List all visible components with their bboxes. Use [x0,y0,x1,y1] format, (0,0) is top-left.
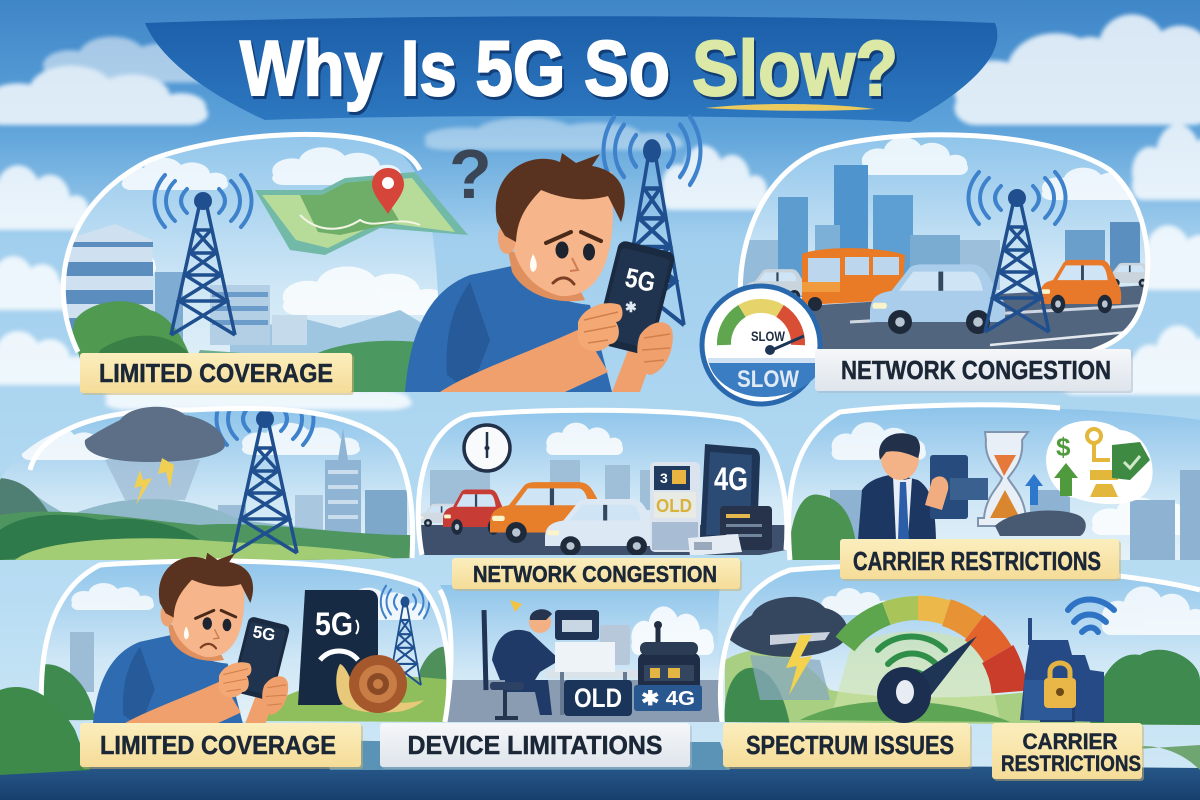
panel: carrier restrictions middle [785,405,1200,565]
title underline [705,104,875,111]
tower left [154,175,252,335]
4G phone [700,444,760,540]
label: carrier restrictions bottom [992,723,1144,781]
label: limited coverage bottom [80,723,363,769]
panel: limited coverage bottom [35,553,455,730]
restriction icons: $ [1056,432,1071,462]
label: carrier restrictions bottom: RESTRICTIONS [1001,751,1141,776]
road [808,286,1144,349]
monitors [555,610,630,672]
buildings [218,428,407,540]
man figure [405,153,676,392]
title highlighted word: Slow? [692,24,898,112]
map [255,172,468,255]
panel: network congestion top [730,130,1160,360]
panel: limited coverage top [61,132,468,392]
background clouds [0,14,1200,410]
label: network congestion top: NETWORK CONGESTION [841,355,1111,385]
road [421,525,786,555]
snail [336,655,424,713]
floor [445,680,720,725]
green wifi [878,636,945,677]
panel: network congestion middle [410,405,800,560]
label: network congestion top [815,349,1133,393]
label: limited coverage top: LIMITED COVERAGE [99,358,333,388]
businessman [858,433,988,540]
bush [788,494,858,560]
OLD box [564,680,632,716]
title banner [145,16,997,122]
panel: device limitations [438,585,720,722]
skyline [70,632,94,692]
gauge badge [702,286,824,404]
label: carrier restrictions bottom: CARRIER [1022,729,1118,754]
speed gauge [845,608,1010,692]
big man with phone [405,117,700,392]
locked building [1020,618,1104,722]
hourglass [978,432,1030,526]
small tower [381,586,429,685]
hills [35,494,405,560]
label: spectrum issues [723,723,972,769]
up arrow [1025,474,1043,505]
badge small word: SLOW [751,328,786,344]
phone text: 5G [623,262,658,298]
traffic cars [745,248,1152,334]
label: carrier restrictions middle [840,539,1121,581]
man small [93,553,290,727]
4G box: ✱ 4G [641,688,695,710]
skyline [430,460,650,510]
storm cloud [85,407,225,505]
storm cloud right [730,597,848,700]
badge large word: SLOW [737,366,799,393]
OLD box: OLD [574,683,622,713]
restriction icons [1046,421,1153,504]
4G phone: 4G [714,461,748,497]
bushes [72,301,189,358]
server [720,506,772,550]
modem [688,534,742,556]
old router [638,621,700,695]
question mark: ? [449,135,492,213]
city skyline [740,165,1140,300]
phone label: 5G [251,622,277,645]
label: device limitations: DEVICE LIMITATIONS [408,730,662,760]
panel: spectrum issues [715,560,1200,730]
tower right [968,172,1066,332]
phone sparkle: ✱ [625,299,637,315]
title text: Why Is 5G So [240,24,670,112]
gauge needle [877,636,977,723]
building left [65,224,307,345]
old phone stack: OLD [656,496,692,516]
cars [418,482,660,556]
tower storm [216,393,314,553]
clock [464,425,510,471]
old phone stack: 3 [660,470,668,486]
trees and grass [420,646,446,680]
label: network congestion middle: NETWORK CONGESTION [473,561,717,587]
map pin [372,168,404,214]
wifi blue [1068,600,1114,632]
label: carrier restrictions middle: CARRIER RESTRICTIONS [853,546,1101,576]
mountains [230,310,421,353]
desk person [484,600,640,718]
label: device limitations [380,723,692,769]
label: limited coverage top [80,353,354,395]
4G box [634,685,702,711]
skyline [830,470,1200,560]
label: limited coverage bottom: LIMITED COVERAGE [100,730,336,760]
road and ground [0,687,1200,800]
label: spectrum issues: SPECTRUM ISSUES [746,730,954,760]
big phone: 5G [315,606,353,642]
panel: storm and tower [0,406,416,560]
tower behind man [604,117,700,325]
hills and trees [725,650,1200,725]
big phone [298,590,378,705]
old phone stack [650,462,700,552]
orange bus [802,248,905,311]
gadget [995,511,1086,536]
